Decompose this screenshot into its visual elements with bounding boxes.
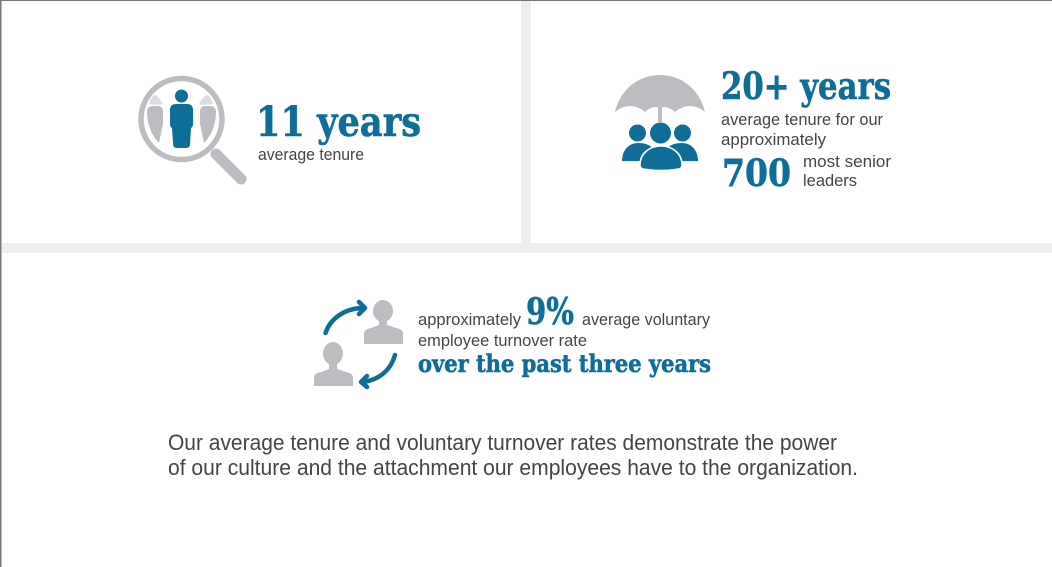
text: average tenure for our approximately [721, 110, 883, 149]
text: average tenure: average tenure [258, 145, 364, 164]
icon: two people with circular arrows [314, 300, 403, 387]
text: average tenure for our approximately: average tenure for our [721, 110, 883, 129]
text: most senior leaders [803, 152, 891, 190]
text: most senior leaders: leaders [803, 171, 857, 190]
text: most senior leaders: most senior [803, 152, 891, 171]
heading: 20+ years: 20+ years [721, 64, 891, 108]
stat: 700: 700 [722, 151, 791, 195]
text: approximately: approximately [418, 310, 521, 329]
panel: average tenure [141, 78, 421, 179]
text: average voluntary employee turnover rate: employee turnover rate [418, 331, 587, 350]
text: average voluntary employee turnover rate: average voluntary [582, 310, 710, 329]
panel: voluntary turnover [314, 291, 711, 387]
text: average tenure for our approximately: approximately [721, 130, 826, 149]
text: average voluntary employee turnover rate [418, 310, 710, 350]
panel: senior leader tenure [615, 64, 891, 195]
icon: magnifying glass with people [141, 78, 241, 179]
heading: over the past three years: over the past three years [418, 349, 711, 378]
text: closing statement: of our culture and the attachment our employees have to the organization. [168, 455, 858, 480]
stat: 9%: 9% [526, 291, 574, 333]
icon: umbrella over people [615, 75, 705, 170]
text: closing statement [168, 430, 858, 480]
text: closing statement: Our average tenure and voluntary turnover rates demonstrate the power [168, 430, 837, 455]
heading: 11 years: 11 years [256, 98, 421, 146]
